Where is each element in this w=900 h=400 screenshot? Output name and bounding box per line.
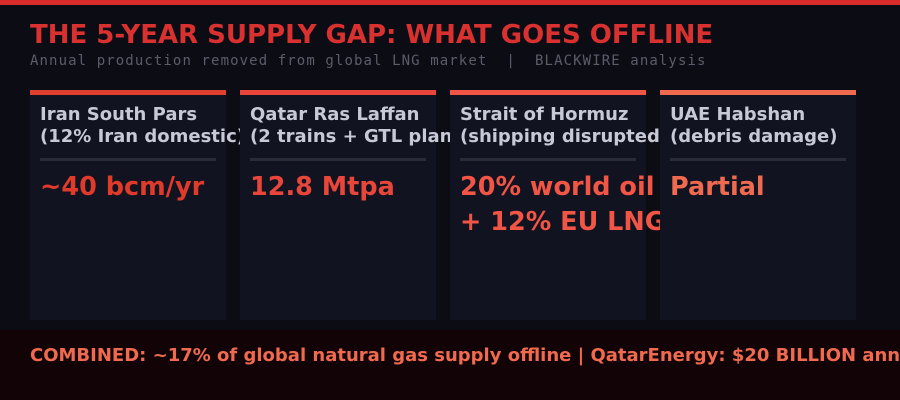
card heading bbox=[40, 104, 245, 147]
card heading: Iran South Pars bbox=[40, 104, 197, 125]
card heading: (2 trains + GTL plant) bbox=[250, 126, 469, 147]
card value: 12.8 Mtpa bbox=[250, 172, 395, 202]
card heading: Qatar Ras Laffan bbox=[250, 104, 420, 125]
card value: + 12% EU LNG bbox=[460, 207, 666, 237]
panel: Iran South Pars bbox=[30, 90, 226, 320]
card heading: (shipping disrupted) bbox=[460, 126, 668, 147]
footer band bbox=[0, 330, 900, 400]
card heading: (12% Iran domestic) bbox=[40, 126, 245, 147]
card value bbox=[460, 172, 666, 237]
panel: UAE Habshan bbox=[660, 90, 856, 320]
panel: Qatar Ras Laffan bbox=[240, 90, 436, 320]
card value: 20% world oil bbox=[460, 172, 654, 202]
card value: ~40 bcm/yr bbox=[40, 172, 204, 202]
card heading: Strait of Hormuz bbox=[460, 104, 628, 125]
card heading bbox=[670, 104, 837, 147]
card heading bbox=[250, 104, 469, 147]
card heading: (debris damage) bbox=[670, 126, 837, 147]
card value: Partial bbox=[670, 172, 765, 202]
card heading: UAE Habshan bbox=[670, 104, 805, 125]
panel: Strait of Hormuz bbox=[450, 90, 646, 320]
title: THE 5-YEAR SUPPLY GAP: WHAT GOES OFFLINE bbox=[30, 20, 713, 50]
card heading bbox=[460, 104, 668, 147]
subtitle: Annual production removed from global LNG market | BLACKWIRE analysis bbox=[30, 53, 707, 69]
